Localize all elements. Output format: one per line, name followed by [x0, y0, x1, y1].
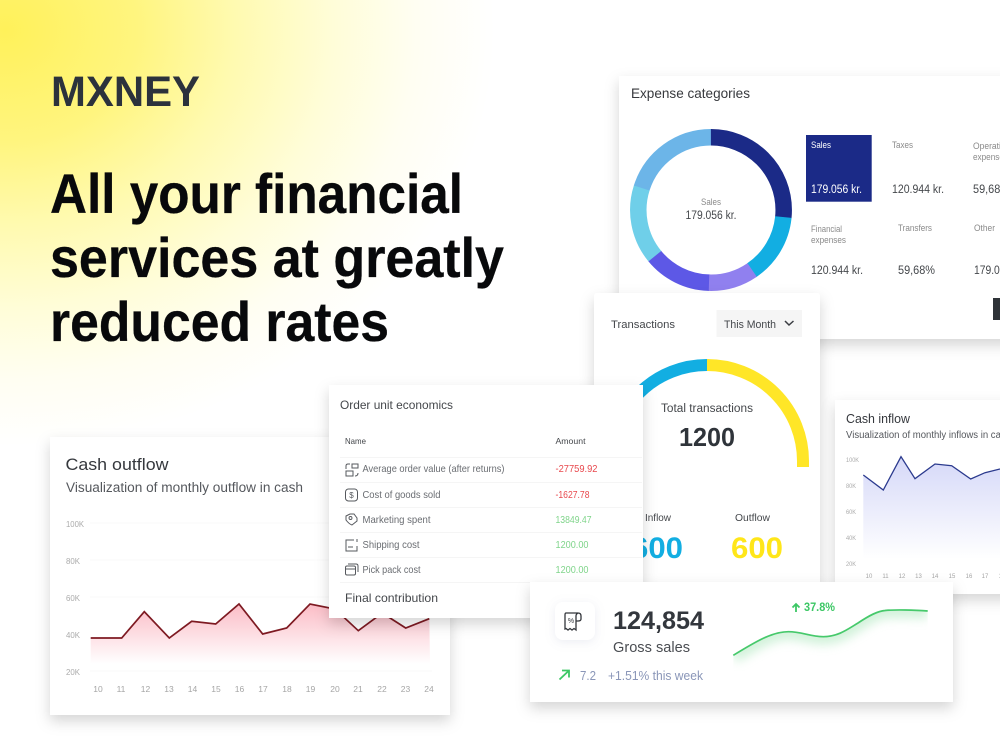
icon: receipt: %	[568, 618, 574, 625]
row: shipping cost: 1200.00	[556, 539, 589, 551]
panel: gross sales	[530, 582, 953, 702]
stat: inflow: Inflow	[645, 513, 672, 524]
category tile: sales: Sales	[811, 140, 831, 150]
row: marketing spent: 13849.47	[556, 514, 592, 526]
heading: cash inflow: Cash inflow	[846, 412, 911, 426]
row: final contribution: Final contribution	[345, 591, 438, 605]
line chart: outflow: 21	[353, 684, 363, 694]
line chart: outflow: 13	[164, 684, 174, 694]
category tile: sales: 179.056 kr.	[811, 184, 862, 196]
category: taxes: 120.944 kr.	[892, 184, 944, 196]
stat: outflow	[731, 513, 783, 565]
line chart: inflow: 17	[982, 574, 989, 580]
dropdown: this month: This Month	[724, 319, 776, 331]
line chart: outflow: 20	[330, 684, 340, 694]
line chart: inflow: 80K	[846, 484, 856, 490]
stat: inflow: 600	[631, 532, 683, 565]
row: marketing spent: Marketing spent	[362, 514, 431, 526]
headline: reduced rates	[50, 290, 389, 353]
dropdown: this month	[716, 310, 802, 337]
category: taxes	[892, 140, 944, 196]
line chart: outflow: 14	[188, 684, 197, 694]
line chart: outflow: 60K	[66, 593, 80, 603]
sparkline	[733, 610, 928, 655]
gauge: total transactions	[611, 365, 803, 467]
line chart: outflow	[66, 519, 434, 694]
line chart: outflow: 17	[258, 684, 268, 694]
row: cost of goods sold: $	[349, 491, 354, 500]
logo: MXNEY: MXNEY	[51, 68, 200, 116]
line chart: outflow: 80K	[66, 556, 80, 566]
category tile: sales	[806, 135, 872, 202]
total transactions value: 1200	[679, 422, 735, 452]
row: shipping cost: Shipping cost	[362, 539, 420, 551]
panel: expense categories	[609, 76, 1000, 339]
category: financial expenses: 120.944 kr.	[811, 265, 863, 277]
row: pick pack cost: Pick pack cost	[362, 564, 421, 576]
row: pick pack cost	[346, 564, 589, 576]
line chart: inflow: 12	[899, 574, 906, 580]
line chart: inflow: 14	[932, 574, 939, 580]
row: shipping cost	[346, 539, 589, 551]
stat: outflow: 600	[731, 532, 783, 565]
panel: cash inflow	[835, 400, 1000, 594]
category: financial expenses: Financial	[811, 224, 842, 234]
line chart: inflow: 15	[949, 574, 956, 580]
line chart: outflow: 19	[306, 684, 315, 694]
line chart: inflow: 40K	[846, 536, 856, 542]
donut centre label	[686, 197, 736, 222]
line chart: outflow: 20K	[66, 667, 80, 677]
panel: order unit economics	[329, 385, 643, 618]
category: financial expenses: expenses	[811, 235, 846, 245]
category: transfers	[898, 223, 935, 277]
panel: transactions	[594, 293, 820, 603]
line chart: inflow: 16	[966, 574, 973, 580]
heading: transactions: Transactions	[611, 319, 676, 331]
category: taxes: Taxes	[892, 140, 913, 150]
label: gross sales: Gross sales	[613, 639, 690, 656]
growth badge: 37.8%: 37.8%	[804, 602, 835, 614]
line chart: inflow: 11	[882, 574, 889, 580]
heading: order unit economics: Order unit economics	[340, 398, 453, 412]
row: cost of goods sold: -1627.78	[556, 489, 590, 501]
weekly change: +1.51% this week	[608, 668, 703, 683]
line chart: inflow: 13	[915, 574, 922, 580]
table header: Amount	[556, 436, 586, 446]
category: operational expenses	[973, 141, 1000, 196]
line chart: inflow: 20K	[846, 562, 856, 568]
table header	[345, 436, 586, 446]
category: other	[974, 223, 1000, 277]
line chart: inflow: 60K	[846, 510, 856, 516]
line chart: outflow: 16	[235, 684, 244, 694]
row: average order value	[346, 463, 598, 476]
line chart: outflow: 100K	[66, 519, 84, 529]
icon: up-right arrow	[560, 670, 569, 680]
row: average order value: -27759.92	[556, 463, 598, 475]
heading: cash outflow: Cash outflow	[66, 456, 169, 474]
value: 124,854: 124,854	[613, 607, 704, 635]
row: cost of goods sold	[346, 489, 590, 501]
line chart: outflow: 22	[377, 684, 387, 694]
headline	[50, 162, 504, 353]
row: cost of goods sold: Cost of goods sold	[362, 489, 441, 501]
headline: All your financial	[50, 162, 463, 225]
line chart: outflow: 11	[117, 684, 126, 694]
row: average order value: Average order value (after returns)	[362, 463, 504, 475]
line chart: outflow: 24	[424, 684, 434, 694]
total transactions label: Total transactions	[661, 403, 753, 415]
line chart: outflow: 18	[282, 684, 292, 694]
row: pick pack cost: 1200.00	[556, 564, 589, 576]
line chart: outflow: 10	[93, 684, 103, 694]
row: marketing spent	[346, 514, 592, 526]
donut chart	[609, 108, 813, 312]
dark button	[993, 298, 1000, 320]
category: transfers: 59,68%	[898, 265, 935, 277]
weekly change: 7.2	[580, 668, 596, 683]
subtitle: cash outflow: Visualization of monthly outflow in cash	[66, 480, 303, 495]
stat: outflow: Outflow	[735, 513, 771, 524]
panel: cash outflow	[50, 437, 450, 715]
line chart: outflow: 12	[141, 684, 150, 694]
stat: inflow	[631, 513, 683, 565]
donut centre label: 179.056 kr.	[686, 210, 736, 222]
heading: expense categories: Expense categories	[631, 85, 750, 101]
headline: services at greatly	[50, 226, 504, 289]
line chart: inflow: 10	[866, 574, 873, 580]
line chart: inflow: 100K	[846, 458, 859, 464]
donut centre label: Sales	[701, 197, 721, 207]
category: transfers: Transfers	[898, 223, 932, 233]
line chart: outflow: 15	[211, 684, 221, 694]
line chart: inflow	[846, 457, 1000, 580]
line chart: outflow: 40K	[66, 630, 80, 640]
line chart: outflow: 23	[401, 684, 410, 694]
category: other: Other	[974, 223, 995, 233]
icon: receipt	[555, 602, 595, 640]
category: financial expenses	[811, 224, 863, 277]
table header: Name	[345, 436, 366, 446]
